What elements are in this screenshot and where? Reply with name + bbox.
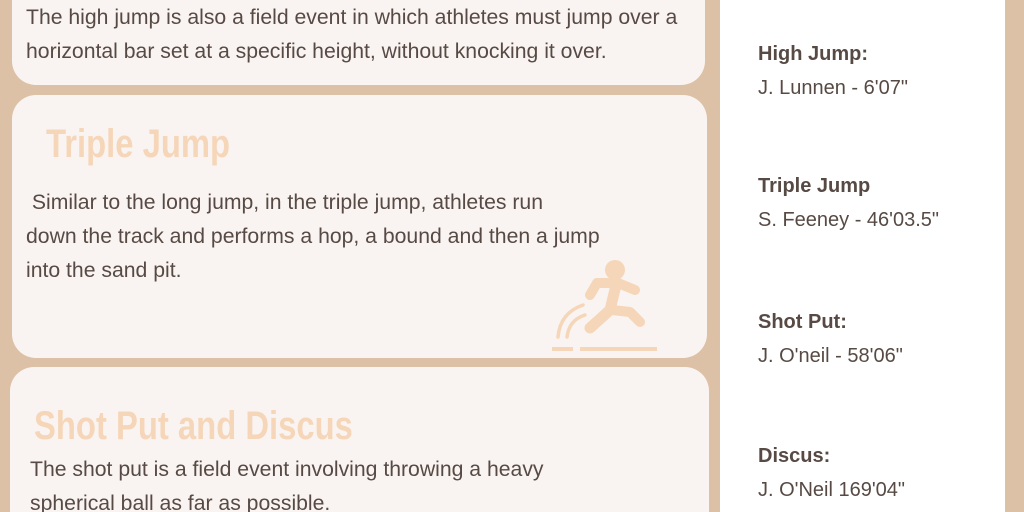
- text: triple jump description: down the track and performs a hop, a bound and then a jump: [26, 225, 600, 248]
- record: discus: Discus:: [758, 445, 830, 467]
- record: high jump: [758, 43, 908, 99]
- panel: high jump card: [12, 0, 705, 85]
- panel: records sidebar: [720, 0, 1005, 512]
- text: triple jump description: [26, 191, 600, 282]
- panel: triple jump card: [12, 95, 707, 358]
- panel: shot put and discus card: [10, 367, 709, 512]
- record: shot put: Shot Put:: [758, 311, 847, 333]
- record: high jump: High Jump:: [758, 43, 868, 65]
- record: shot put: [758, 311, 903, 367]
- text: triple jump description: into the sand pit.: [26, 259, 181, 282]
- heading: triple jump: Triple Jump: [46, 122, 230, 166]
- record: triple jump: Triple Jump: [758, 175, 870, 197]
- record: discus: J. O'Neil 169'04": [758, 479, 905, 501]
- record: discus: [758, 445, 905, 501]
- record: shot put: J. O'neil - 58'06": [758, 345, 903, 367]
- text: high jump description: The high jump is also a field event in which athletes must jump over a: [26, 6, 677, 29]
- record: triple jump: S. Feeney - 46'03.5": [758, 209, 939, 231]
- record: high jump: J. Lunnen - 6'07": [758, 77, 908, 99]
- text: triple jump description: Similar to the long jump, in the triple jump, athletes run: [32, 191, 543, 214]
- text: high jump description: [26, 6, 678, 63]
- record: triple jump: [758, 175, 939, 231]
- text: high jump description: horizontal bar set at a specific height, without knocking it over.: [26, 40, 607, 63]
- icon: runner: [552, 260, 657, 351]
- text: shot put description: [30, 458, 544, 512]
- heading: shot put and discus: Shot Put and Discus: [34, 404, 353, 448]
- text: shot put description: The shot put is a field event involving throwing a heavy: [30, 458, 544, 481]
